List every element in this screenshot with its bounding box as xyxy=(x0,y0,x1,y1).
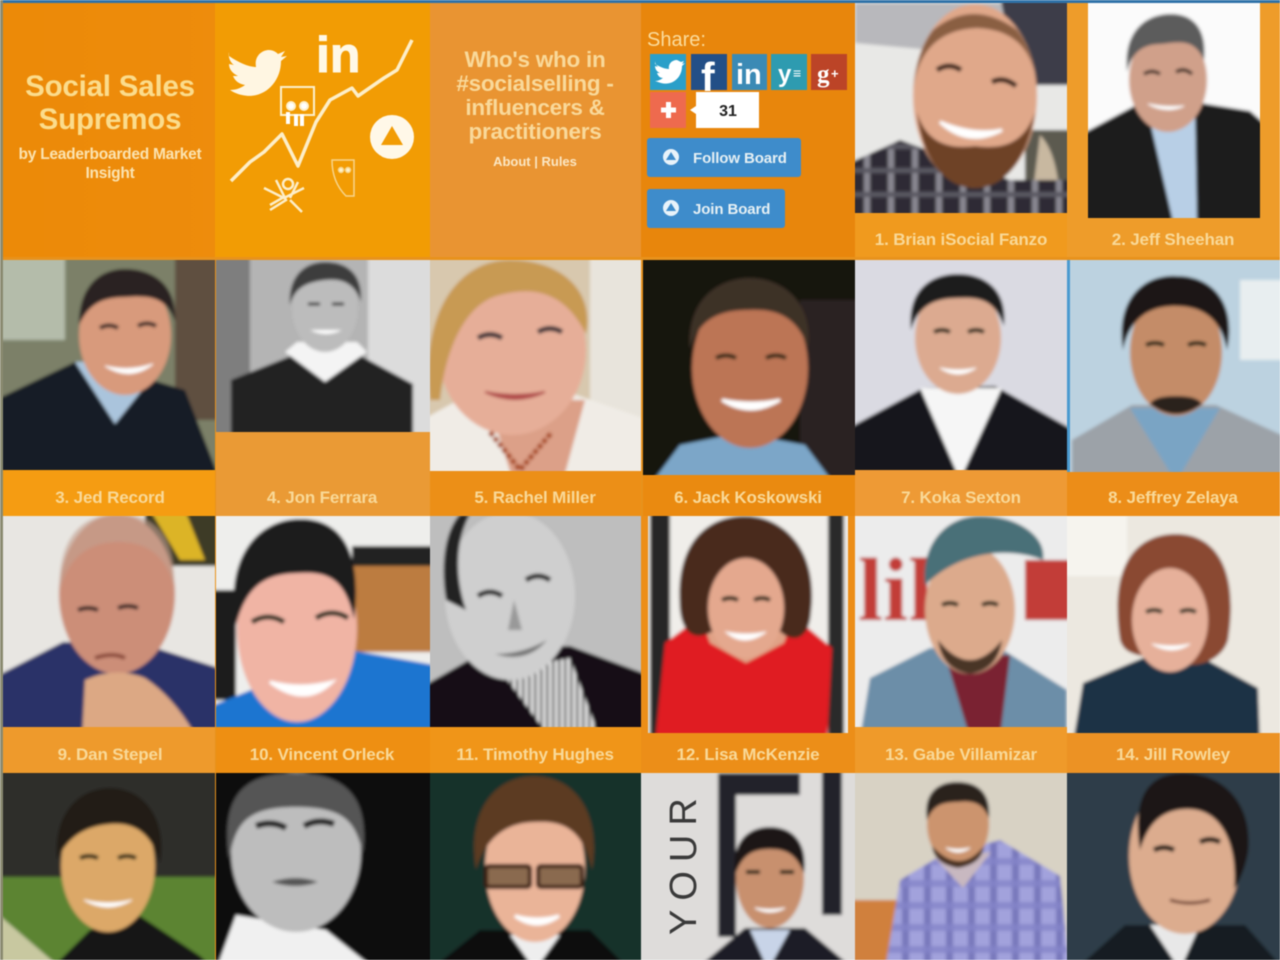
panel: social logo graphic xyxy=(215,3,430,257)
portrait card: Koka Sexton xyxy=(854,259,1068,516)
byline: Insight xyxy=(85,165,135,182)
wall lettering: YOUR: YOUR xyxy=(663,789,705,935)
portrait card: Timothy Hughes xyxy=(429,515,642,764)
portrait: board member 18 xyxy=(640,772,856,960)
panel: board title xyxy=(3,3,215,257)
heading: Social Sales Supremos: Social Sales xyxy=(25,70,195,103)
button: google plus share xyxy=(811,54,847,90)
button: yammer share xyxy=(771,54,807,90)
share count bubble: 31 xyxy=(719,103,737,120)
button: follow board: Follow Board xyxy=(693,150,787,167)
icon: xing figure xyxy=(264,179,304,212)
button: join board: Join Board xyxy=(693,201,770,218)
caption: 10. Vincent Orleck xyxy=(250,745,395,764)
icon: slideshare xyxy=(281,87,314,126)
icon: linkedin in: in xyxy=(316,27,360,83)
caption: 3. Jed Record xyxy=(55,488,165,507)
caption: 7. Koka Sexton xyxy=(901,488,1021,507)
portrait: board member 17 xyxy=(429,772,642,960)
portrait: board member 20 xyxy=(1057,763,1280,960)
icon: twitter bird xyxy=(229,50,287,96)
portrait card: Gabe Villamizar xyxy=(854,515,1068,773)
share count bubble xyxy=(690,92,759,128)
button: twitter share xyxy=(650,54,686,90)
button: linkedin share: in xyxy=(736,59,762,91)
button: google plus share: + xyxy=(831,66,839,81)
caption: 4. Jon Ferrara xyxy=(267,488,378,507)
portrait card: Dan Stepel xyxy=(0,506,225,773)
caption: 9. Dan Stepel xyxy=(58,745,162,764)
heading: who's who: practitioners xyxy=(468,119,602,144)
portrait card: Jeff Sheehan xyxy=(1067,0,1280,257)
button: facebook share: f xyxy=(701,54,715,100)
caption: 12. Lisa McKenzie xyxy=(677,745,819,764)
button: join board xyxy=(647,189,785,228)
caption: 8. Jeffrey Zelaya xyxy=(1108,488,1239,507)
panel: board description xyxy=(430,3,641,257)
portrait card: Jill Rowley xyxy=(1066,515,1280,764)
portrait card: Brian iSocial Fanzo xyxy=(854,2,1068,246)
caption: 2. Jeff Sheehan xyxy=(1112,230,1234,249)
portrait card: Rachel Miller xyxy=(429,259,642,504)
panel: share and actions xyxy=(641,3,855,257)
label: share: Share: xyxy=(647,29,706,51)
caption: 5. Rachel Miller xyxy=(474,488,596,507)
portrait card: Jack Koskowski xyxy=(642,259,856,516)
caption: 1. Brian iSocial Fanzo xyxy=(875,230,1047,249)
links: about and rules: About | Rules xyxy=(493,154,577,169)
portrait card: Lisa McKenzie xyxy=(647,515,849,760)
portrait card: Vincent Orleck xyxy=(215,515,431,772)
portrait card: Jeffrey Zelaya xyxy=(1066,259,1280,507)
portrait card: Jon Ferrara xyxy=(215,259,431,516)
caption: 11. Timothy Hughes xyxy=(456,745,614,764)
button: yammer share: y xyxy=(778,61,792,88)
portrait: board member 19 xyxy=(854,772,1068,960)
button: google plus share: g xyxy=(817,61,830,88)
button: linkedin share xyxy=(732,54,767,91)
heading: who's who: influencers & xyxy=(465,95,605,120)
button: yammer share: ≡ xyxy=(793,65,801,81)
byline: by Leaderboarded Market xyxy=(19,146,201,163)
button: facebook share xyxy=(691,54,727,100)
heading: who's who: #socialselling - xyxy=(456,71,614,96)
portrait card: Gabe Villamizar: like xyxy=(858,541,998,640)
caption: 14. Jill Rowley xyxy=(1116,745,1231,764)
heading: who's who: Who's who in xyxy=(464,47,606,72)
caption: 13. Gabe Villamizar xyxy=(885,745,1037,764)
button: more share xyxy=(650,92,686,128)
portrait: board member 15 xyxy=(0,763,225,960)
portrait: board member 16 xyxy=(215,772,431,960)
caption: 6. Jack Koskowski xyxy=(674,488,822,507)
portrait card: Jed Record xyxy=(0,250,225,516)
heading: Social Sales Supremos: Supremos xyxy=(39,103,181,136)
icon: leaderboarded triangle badge xyxy=(370,115,414,159)
button: follow board xyxy=(647,138,801,177)
icon: rising line chart xyxy=(231,40,412,181)
icon: hootsuite owl xyxy=(332,160,354,196)
